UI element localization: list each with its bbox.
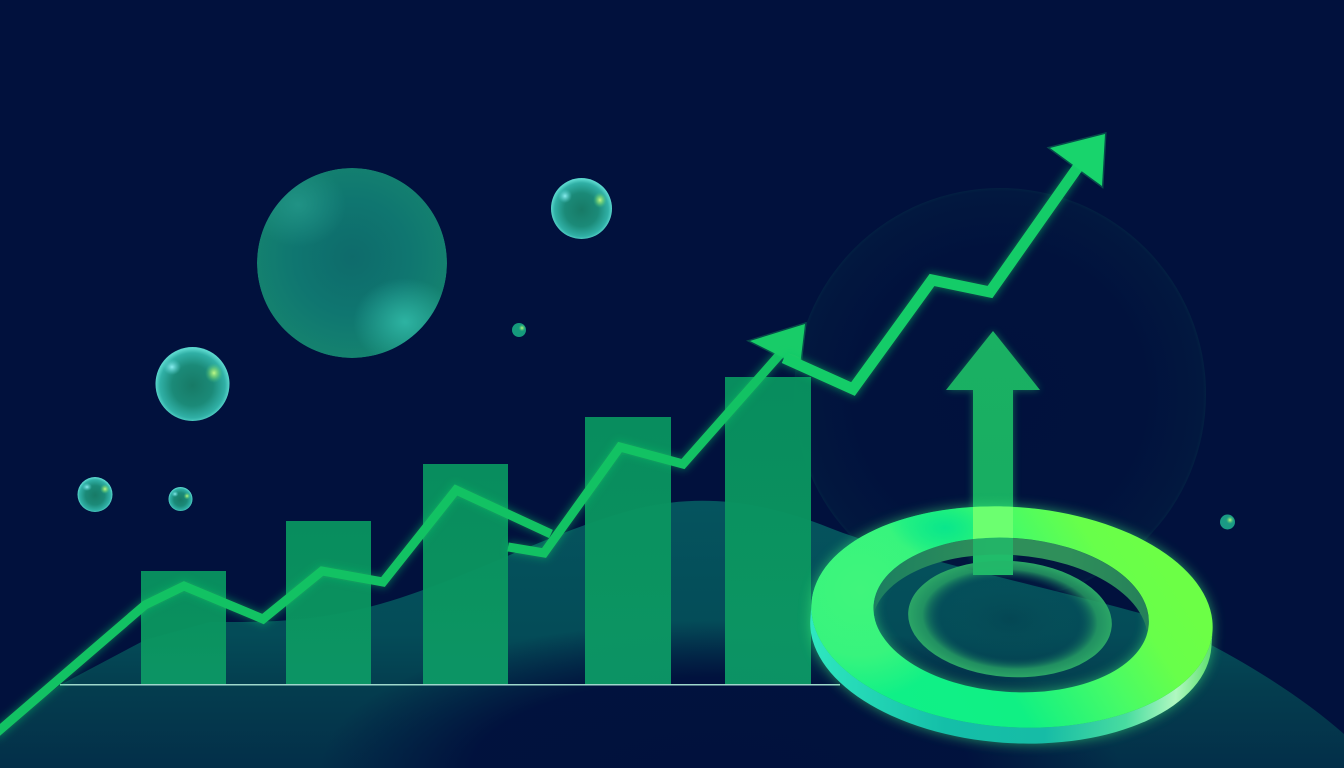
dot right — [1220, 514, 1235, 530]
big sphere — [257, 168, 447, 358]
ring glow — [803, 493, 1220, 757]
bar chart — [141, 377, 811, 685]
bubble small — [168, 487, 192, 511]
hill: teal ground — [0, 501, 1344, 768]
trend line lower with arrow — [0, 324, 805, 735]
bubble top centre — [551, 178, 612, 239]
up arrow — [946, 331, 1040, 575]
arrow shaft through hole — [973, 536, 1013, 575]
ring side wall — [803, 603, 1213, 757]
bubble left small — [78, 477, 112, 512]
trend line upper with arrow — [784, 134, 1105, 389]
dot centre — [512, 323, 526, 337]
glowing ring — [804, 498, 1221, 752]
ring top face shading — [811, 506, 1013, 690]
faint halo circle — [794, 188, 1206, 600]
inner glowing disc — [904, 554, 1116, 684]
bubble left large — [156, 347, 230, 421]
ring top face — [804, 493, 1220, 741]
ring inner wall — [874, 538, 1148, 632]
baseline — [60, 684, 840, 686]
